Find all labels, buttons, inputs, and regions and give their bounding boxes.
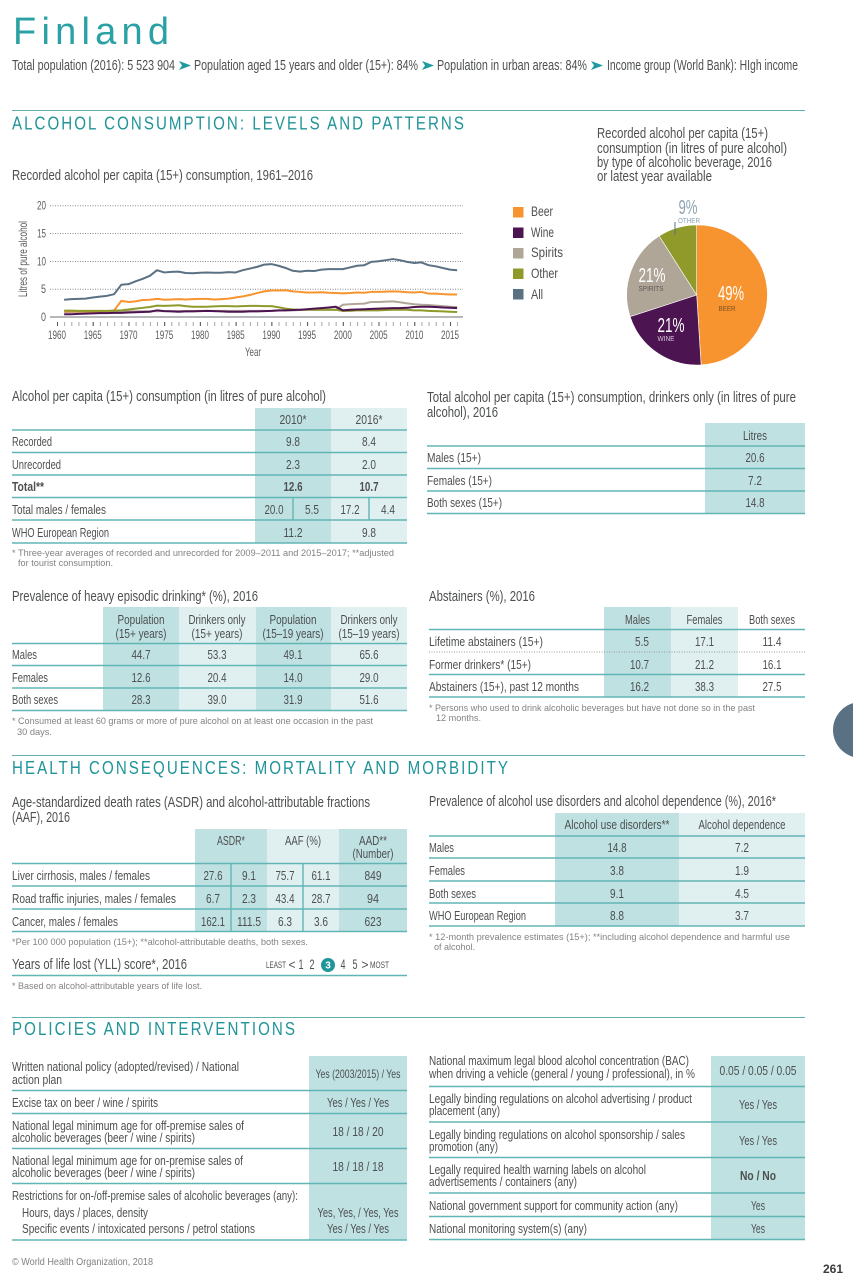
table: death rates: (Number) bbox=[352, 846, 394, 861]
table: policies right: promotion (any) bbox=[429, 1139, 498, 1154]
pie chart: 21% bbox=[638, 265, 666, 287]
table: heavy episodic drinking: 49.1 bbox=[284, 647, 302, 662]
line chart: 1995 bbox=[298, 328, 316, 342]
country facts line bbox=[12, 58, 798, 74]
line chart: 20 bbox=[37, 198, 46, 212]
table: alcohol use disorders: 4.5 bbox=[735, 886, 749, 901]
table: alcohol per capita consumption: 20.0 bbox=[264, 502, 284, 517]
table: policies left: action plan bbox=[12, 1072, 62, 1087]
table: drinkers only consumption bbox=[427, 390, 805, 514]
table: death rates: 6.3 bbox=[278, 914, 292, 929]
table: drinkers only consumption: 7.2 bbox=[748, 473, 762, 488]
line chart: Litres of pure alcohol bbox=[16, 221, 30, 297]
table: policies left: 18 / 18 / 18 bbox=[332, 1159, 384, 1174]
table: alcohol per capita consumption: Unrecorded bbox=[12, 457, 61, 472]
table: heavy episodic drinking: 53.3 bbox=[208, 647, 226, 662]
table: alcohol use disorders: 14.8 bbox=[608, 840, 626, 855]
table: policies left: Restrictions for on-/off-premise sales of alcoholic beverages (any): bbox=[12, 1188, 298, 1203]
table: alcohol use disorders: 8.8 bbox=[610, 908, 624, 923]
table: alcohol use disorders: of alcohol. bbox=[434, 942, 475, 953]
page number: 261 bbox=[823, 1262, 843, 1276]
table: alcohol use disorders: 7.2 bbox=[735, 840, 749, 855]
table: alcohol per capita consumption: 4.4 bbox=[381, 502, 395, 517]
table: death rates: 61.1 bbox=[312, 868, 330, 883]
table: death rates: *Per 100 000 population (15+); **alcohol-attributable deaths, both sexes. bbox=[12, 937, 308, 948]
table: heavy episodic drinking: Females bbox=[12, 670, 48, 685]
line chart bbox=[16, 198, 463, 359]
table: heavy episodic drinking: 20.4 bbox=[208, 670, 226, 685]
line chart: 1970 bbox=[120, 328, 138, 342]
table: alcohol use disorders: 1.9 bbox=[735, 863, 749, 878]
table: death rates: 3.6 bbox=[314, 914, 328, 929]
table: abstainers: 16.1 bbox=[762, 657, 782, 672]
table: death rates: Age-standardized death rates (ASDR) and alcohol-attributable fractions bbox=[12, 795, 370, 811]
line chart: 10 bbox=[37, 254, 46, 268]
table: heavy episodic drinking: 12.6 bbox=[132, 670, 150, 685]
table: heavy episodic drinking: (15+ years) bbox=[116, 626, 166, 641]
line chart: 0 bbox=[41, 310, 46, 324]
table: alcohol use disorders: Both sexes bbox=[429, 886, 476, 901]
table: death rates: 94 bbox=[367, 891, 379, 906]
table: death rates: 75.7 bbox=[276, 868, 294, 883]
table: alcohol use disorders: 3.7 bbox=[735, 908, 749, 923]
table: policies right: when driving a vehicle (general / young / professional), in % bbox=[428, 1066, 695, 1081]
pie chart: 49% bbox=[718, 283, 744, 305]
table: alcohol use disorders: 9.1 bbox=[610, 886, 624, 901]
table: alcohol per capita consumption: Recorded bbox=[12, 434, 52, 449]
legend: Wine bbox=[531, 224, 554, 240]
pie chart: 21% bbox=[658, 315, 685, 337]
table: drinkers only consumption: 14.8 bbox=[746, 495, 764, 510]
table: heavy episodic drinking: 30 days. bbox=[17, 727, 52, 738]
table: death rates: ASDR* bbox=[217, 833, 245, 848]
pie chart: 9% bbox=[678, 197, 698, 219]
country facts line: Total population (2016): 5 523 904 bbox=[12, 58, 175, 74]
table: death rates: (AAF), 2016 bbox=[12, 810, 70, 826]
table: policies left: Yes (2003/2015) / Yes bbox=[316, 1067, 400, 1081]
table: abstainers: 10.7 bbox=[630, 657, 649, 672]
table: death rates: Road traffic injuries, males / females bbox=[12, 891, 176, 906]
table: abstainers: Males bbox=[625, 612, 650, 627]
table: alcohol use disorders: WHO European Region bbox=[429, 908, 526, 923]
table: alcohol per capita consumption: 5.5 bbox=[305, 502, 319, 517]
table: alcohol use disorders: Males bbox=[429, 840, 454, 855]
table: abstainers: 17.1 bbox=[695, 634, 714, 649]
pie chart bbox=[627, 197, 767, 365]
pie chart heading: or latest year available bbox=[597, 169, 712, 185]
line chart: 1980 bbox=[191, 328, 209, 342]
table: policies right: National government support for community action (any) bbox=[429, 1198, 678, 1213]
table: death rates: AAD** bbox=[359, 833, 387, 848]
years of life lost score bbox=[12, 956, 407, 992]
table: alcohol per capita consumption: 2010* bbox=[280, 412, 306, 427]
table: policies right: Yes bbox=[751, 1221, 765, 1236]
line chart: 2005 bbox=[370, 328, 388, 342]
title: Finland bbox=[13, 11, 169, 53]
line chart: 1985 bbox=[227, 328, 245, 342]
table: heavy episodic drinking: (15–19 years) bbox=[338, 626, 400, 641]
table: policies right bbox=[428, 1053, 805, 1240]
legend bbox=[513, 203, 563, 302]
table: death rates: 9.1 bbox=[242, 868, 256, 883]
years of life lost score: 1 bbox=[298, 957, 304, 972]
table: alcohol use disorders: Alcohol dependence bbox=[698, 817, 786, 832]
table: policies left: National legal minimum age for off-premise sales of bbox=[12, 1118, 244, 1133]
table: death rates: 27.6 bbox=[204, 868, 222, 883]
table: alcohol per capita consumption bbox=[12, 389, 407, 569]
table: alcohol per capita consumption: 11.2 bbox=[284, 525, 302, 540]
table: policies left bbox=[12, 1056, 407, 1240]
table: heavy episodic drinking: Population bbox=[118, 612, 164, 627]
table: alcohol per capita consumption: 17.2 bbox=[340, 502, 360, 517]
heading: alcohol consumption: ALCOHOL CONSUMPTION: LEVELS AND PATTERNS bbox=[12, 112, 466, 134]
line chart heading: Recorded alcohol per capita (15+) consumption, 1961–2016 bbox=[12, 168, 313, 184]
table: heavy episodic drinking: 29.0 bbox=[360, 670, 378, 685]
page tab bbox=[833, 702, 853, 758]
table: death rates: Liver cirrhosis, males / females bbox=[12, 868, 150, 883]
table: heavy episodic drinking: 39.0 bbox=[208, 692, 226, 707]
table: policies right: 0.05 / 0.05 / 0.05 bbox=[720, 1063, 796, 1078]
line chart: Year bbox=[245, 345, 261, 359]
table: alcohol per capita consumption: Total males / females bbox=[12, 502, 106, 517]
table: policies right: placement (any) bbox=[429, 1103, 500, 1118]
table: death rates: 849 bbox=[364, 868, 382, 883]
table: death rates: 623 bbox=[364, 914, 382, 929]
table: drinkers only consumption: Females (15+) bbox=[427, 473, 492, 488]
table: abstainers: Lifetime abstainers (15+) bbox=[429, 634, 543, 649]
legend: Spirits bbox=[531, 244, 563, 260]
table: policies left: National legal minimum age for on-premise sales of bbox=[12, 1153, 243, 1168]
table: policies right: Legally binding regulations on alcohol advertising / product bbox=[429, 1091, 692, 1106]
table: abstainers: * Persons who used to drink alcoholic beverages but have not done so in the past bbox=[429, 703, 755, 714]
pie chart: OTHER bbox=[678, 218, 700, 225]
table: death rates: 162.1 bbox=[201, 914, 225, 929]
table: death rates: 2.3 bbox=[242, 891, 256, 906]
table: death rates: 111.5 bbox=[237, 914, 261, 929]
pie chart heading: consumption (in litres of pure alcohol) bbox=[597, 141, 787, 157]
table: abstainers: 12 months. bbox=[436, 713, 481, 724]
table: alcohol per capita consumption: 9.8 bbox=[362, 525, 376, 540]
table: heavy episodic drinking: 31.9 bbox=[284, 692, 302, 707]
years of life lost score: LEAST bbox=[266, 960, 286, 970]
table: heavy episodic drinking: Drinkers only bbox=[340, 612, 398, 627]
table: alcohol per capita consumption: WHO European Region bbox=[12, 525, 109, 540]
table: abstainers: 16.2 bbox=[630, 679, 649, 694]
table: alcohol use disorders: * 12-month prevalence estimates (15+); **including alcohol dependence and harmful use bbox=[429, 932, 790, 943]
table: policies left: Yes, Yes, / Yes, Yes bbox=[318, 1205, 399, 1220]
table: heavy episodic drinking: (15+ years) bbox=[192, 626, 242, 641]
years of life lost score: Years of life lost (YLL) score*, 2016 bbox=[12, 956, 187, 973]
table: alcohol per capita consumption: 2.3 bbox=[286, 457, 300, 472]
table: death rates bbox=[12, 795, 407, 948]
table: alcohol per capita consumption: Total** bbox=[12, 479, 45, 494]
table: alcohol per capita consumption: 9.8 bbox=[286, 434, 300, 449]
table: policies left: Specific events / intoxicated persons / petrol stations bbox=[22, 1221, 255, 1236]
table: heavy episodic drinking: 44.7 bbox=[132, 647, 150, 662]
table: alcohol per capita consumption: 2016* bbox=[356, 412, 382, 427]
table: drinkers only consumption: Both sexes (15+) bbox=[427, 495, 502, 510]
line chart: 1990 bbox=[262, 328, 281, 342]
table: heavy episodic drinking: 14.0 bbox=[284, 670, 302, 685]
table: abstainers: Abstainers (15+), past 12 months bbox=[429, 679, 579, 694]
country facts line: Population in urban areas: 84% bbox=[437, 58, 587, 74]
table: alcohol use disorders: 3.8 bbox=[610, 863, 624, 878]
table: heavy episodic drinking: 51.6 bbox=[360, 692, 378, 707]
table: alcohol use disorders: Alcohol use disorders** bbox=[564, 817, 670, 832]
table: alcohol use disorders bbox=[429, 794, 805, 953]
table: alcohol use disorders: Females bbox=[429, 863, 465, 878]
table: policies left: Yes / Yes / Yes bbox=[327, 1095, 389, 1110]
table: heavy episodic drinking: Population bbox=[270, 612, 316, 627]
line chart: 1975 bbox=[155, 328, 173, 342]
line chart: 5 bbox=[41, 282, 46, 296]
table: abstainers bbox=[429, 589, 805, 724]
table: heavy episodic drinking bbox=[12, 589, 407, 738]
table: heavy episodic drinking: 28.3 bbox=[132, 692, 150, 707]
country facts line: Population aged 15 years and older (15+): 84% bbox=[194, 58, 418, 74]
pie chart heading: Recorded alcohol per capita (15+) bbox=[597, 126, 768, 142]
table: drinkers only consumption: Males (15+) bbox=[427, 450, 481, 465]
years of life lost score: 5 bbox=[352, 957, 358, 972]
table: policies left: alcoholic beverages (beer / wine / spirits) bbox=[12, 1165, 195, 1180]
table: heavy episodic drinking: Both sexes bbox=[12, 692, 58, 707]
table: alcohol per capita consumption: * Three-year averages of recorded and unrecorded for 2009–2011 and 2015–2017; **adjusted bbox=[12, 548, 394, 559]
line chart: 2000 bbox=[334, 328, 352, 342]
table: alcohol per capita consumption: 12.6 bbox=[284, 479, 302, 494]
table: alcohol per capita consumption: Alcohol per capita (15+) consumption (in litres of pure alcohol) bbox=[12, 389, 326, 405]
table: heavy episodic drinking: 65.6 bbox=[360, 647, 378, 662]
table: policies left: Hours, days / places, density bbox=[22, 1205, 148, 1220]
table: policies right: Legally required health warning labels on alcohol bbox=[429, 1162, 646, 1177]
table: alcohol per capita consumption: 8.4 bbox=[362, 434, 376, 449]
table: heavy episodic drinking: * Consumed at least 60 grams or more of pure alcohol on at least one occasion in the past bbox=[12, 716, 373, 727]
legend: Other bbox=[531, 265, 558, 281]
table: policies right: advertisements / containers (any) bbox=[429, 1174, 577, 1189]
line chart: 1965 bbox=[84, 328, 102, 342]
table: policies right: Legally binding regulations on alcohol sponsorship / sales bbox=[429, 1127, 685, 1142]
table: abstainers: 21.2 bbox=[695, 657, 714, 672]
table: abstainers: 38.3 bbox=[695, 679, 714, 694]
legend: All bbox=[531, 286, 543, 302]
table: abstainers: Abstainers (%), 2016 bbox=[429, 589, 535, 605]
pie chart: BEER bbox=[718, 306, 736, 313]
pie chart: SPIRITS bbox=[638, 286, 664, 293]
heading: policies: POLICIES AND INTERVENTIONS bbox=[12, 1018, 297, 1039]
table: policies right: Yes / Yes bbox=[739, 1097, 777, 1112]
table: policies left: Yes / Yes / Yes bbox=[327, 1221, 389, 1236]
table: death rates: 6.7 bbox=[206, 891, 220, 906]
table: drinkers only consumption: alcohol), 2016 bbox=[427, 405, 498, 421]
table: heavy episodic drinking: Males bbox=[12, 647, 37, 662]
pie chart heading bbox=[597, 126, 787, 185]
table: abstainers: Both sexes bbox=[749, 612, 795, 627]
table: policies left: alcoholic beverages (beer / wine / spirits) bbox=[12, 1130, 195, 1145]
line chart: 2015 bbox=[441, 328, 459, 342]
years of life lost score: 4 bbox=[340, 957, 346, 972]
pie chart: WINE bbox=[658, 336, 675, 343]
years of life lost score: > bbox=[362, 957, 368, 972]
table: policies right: No / No bbox=[740, 1168, 776, 1183]
table: alcohol per capita consumption: for tourist consumption. bbox=[18, 558, 113, 569]
table: policies right: National maximum legal blood alcohol concentration (BAC) bbox=[429, 1053, 689, 1068]
table: abstainers: 5.5 bbox=[635, 634, 649, 649]
legend: Beer bbox=[531, 203, 553, 219]
table: abstainers: 27.5 bbox=[762, 679, 782, 694]
line chart: 1960 bbox=[48, 328, 66, 342]
line chart: 2010 bbox=[405, 328, 424, 342]
table: policies left: Excise tax on beer / wine / spirits bbox=[12, 1095, 158, 1110]
table: policies right: Yes / Yes bbox=[739, 1133, 777, 1148]
table: heavy episodic drinking: (15–19 years) bbox=[262, 626, 324, 641]
table: drinkers only consumption: Litres bbox=[743, 428, 767, 443]
years of life lost score: * Based on alcohol-attributable years of life lost. bbox=[12, 981, 202, 992]
table: death rates: AAF (%) bbox=[285, 833, 321, 848]
heading: health consequences: HEALTH CONSEQUENCES: MORTALITY AND MORBIDITY bbox=[12, 757, 510, 778]
table: abstainers: Former drinkers* (15+) bbox=[429, 657, 531, 672]
table: drinkers only consumption: 20.6 bbox=[746, 450, 764, 465]
table: abstainers: 11.4 bbox=[762, 634, 782, 649]
years of life lost score: < bbox=[288, 957, 296, 972]
table: death rates: Cancer, males / females bbox=[12, 914, 118, 929]
table: policies left: 18 / 18 / 20 bbox=[332, 1124, 384, 1139]
years of life lost score: 3 bbox=[325, 960, 331, 972]
table: death rates: 28.7 bbox=[312, 891, 330, 906]
table: death rates: 43.4 bbox=[276, 891, 294, 906]
table: policies right: Yes bbox=[751, 1198, 765, 1213]
table: alcohol per capita consumption: 2.0 bbox=[362, 457, 376, 472]
table: heavy episodic drinking: Drinkers only bbox=[188, 612, 246, 627]
table: alcohol per capita consumption: 10.7 bbox=[360, 479, 378, 494]
table: heavy episodic drinking: Prevalence of heavy episodic drinking* (%), 2016 bbox=[12, 589, 258, 605]
line chart: 15 bbox=[37, 226, 46, 240]
pie chart heading: by type of alcoholic beverage, 2016 bbox=[597, 155, 772, 171]
copyright: © World Health Organization, 2018 bbox=[12, 1257, 153, 1268]
years of life lost score: 2 bbox=[310, 957, 314, 972]
table: abstainers: Females bbox=[686, 612, 723, 627]
years of life lost score: MOST bbox=[370, 960, 389, 970]
table: policies left: Written national policy (adopted/revised) / National bbox=[12, 1059, 239, 1074]
table: policies right: National monitoring system(s) (any) bbox=[429, 1221, 587, 1236]
